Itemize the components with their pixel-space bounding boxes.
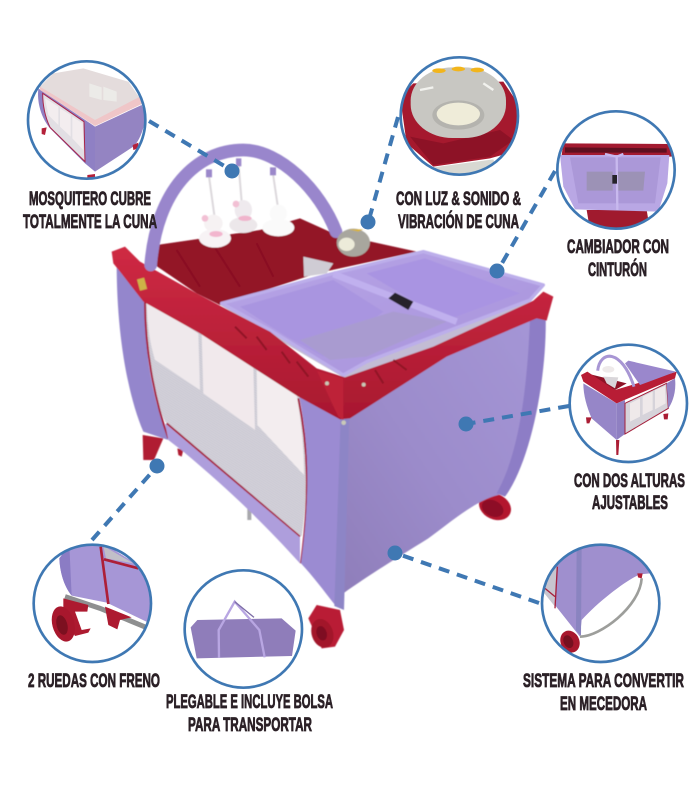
inset: rocking bar: [542, 542, 662, 663]
circle frame: [185, 570, 302, 688]
circle frame: [570, 345, 687, 462]
steel centre leg: [247, 508, 251, 520]
label: light and sound: CON LUZ & SONIDO &: [396, 188, 521, 210]
crib interior: [150, 218, 533, 378]
inset: wheels with brake: [32, 543, 153, 665]
left end purple fabric: [117, 263, 168, 440]
label: foldable bag: [166, 691, 333, 736]
mesh side panel: [145, 293, 307, 563]
bottom fabric strip: [165, 423, 300, 563]
label: foldable bag: PLEGABLE E INCLUYE BOLSA: [166, 691, 333, 713]
red rim: [112, 247, 553, 425]
inset: two heights: [568, 343, 688, 463]
connector: wheels: [92, 458, 164, 540]
circle frame: [557, 111, 675, 229]
connector: two heights: [458, 406, 569, 432]
hanging teddy bears: [199, 158, 294, 248]
inset: sound box: [400, 57, 520, 177]
connector: rocking bar: [388, 546, 539, 603]
front pole: [334, 417, 349, 610]
label: mosquito net: TOTALMENTE LA CUNA: [23, 211, 157, 233]
rear right wheel: [475, 488, 515, 525]
bag: [191, 602, 296, 658]
changing table: [222, 252, 543, 375]
connector: net to arch: [149, 121, 240, 178]
label: wheels: 2 RUEDAS CON FRENO: [28, 670, 160, 692]
circle frame: [34, 545, 151, 662]
large side panel: [343, 312, 533, 593]
music box: [337, 229, 370, 257]
label: changing table: CINTURÓN: [588, 257, 647, 281]
inset: changing table: [557, 110, 677, 230]
connector: changing table: [490, 171, 555, 278]
label: light and sound: [396, 188, 521, 233]
toy arch: [151, 150, 336, 265]
circle frame: [28, 61, 145, 179]
circle frame: [542, 545, 659, 662]
label: light and sound: VIBRACIÓN DE CUNA: [398, 209, 519, 233]
front wheel: [308, 605, 344, 651]
rear left foot: [143, 435, 183, 460]
label: mosquito net: [23, 188, 157, 233]
label: foldable bag: PARA TRANSPORTAR: [188, 714, 312, 736]
label: rocking system: [523, 670, 684, 715]
label: mosquito net: MOSQUITERO CUBRE: [29, 188, 151, 210]
inset: mosquito net: [27, 60, 147, 180]
label: changing table: [567, 236, 669, 281]
front end fabric: [299, 390, 342, 605]
circle frame: [401, 57, 518, 175]
side panel pole: [497, 313, 546, 497]
main product: travel crib: [112, 150, 553, 651]
label: two heights: [574, 470, 685, 514]
connector: sound box: [360, 117, 398, 230]
inset: carry bag: [185, 570, 302, 688]
